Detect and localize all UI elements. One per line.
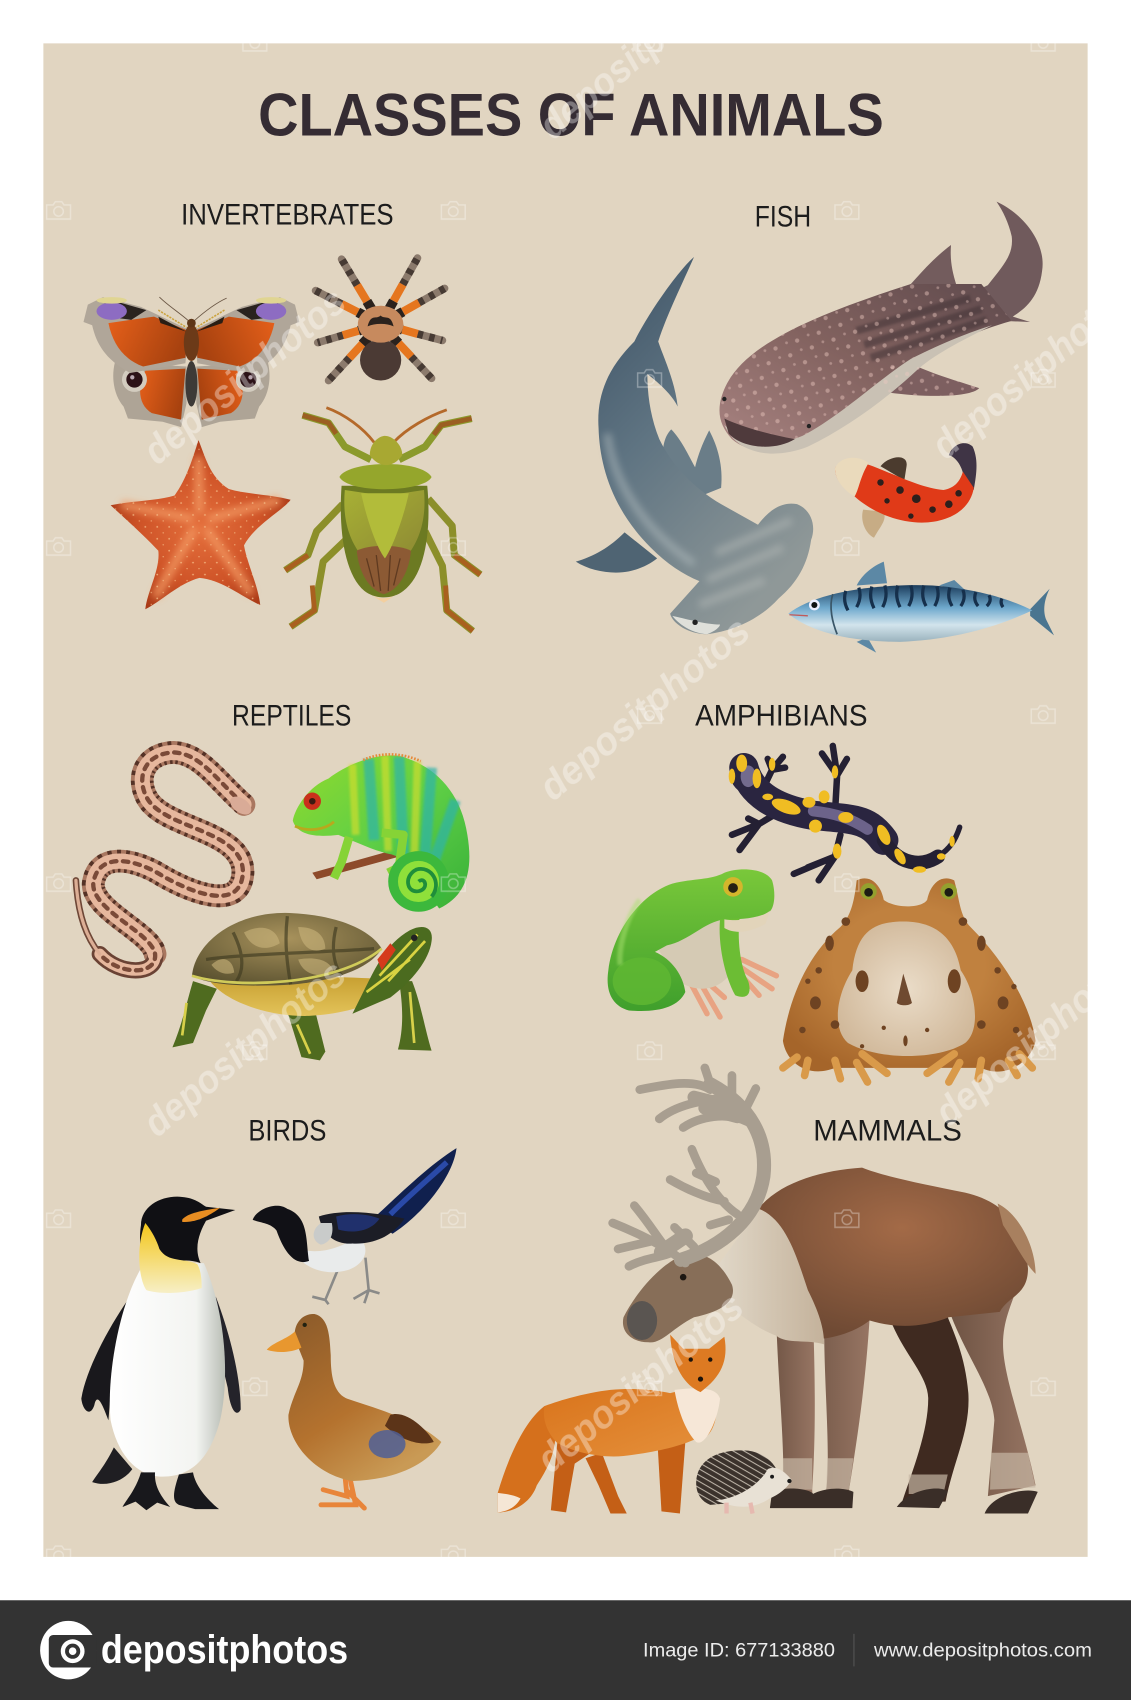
heading: fish: FISH — [755, 202, 811, 234]
footer bar — [0, 1600, 1131, 1700]
icon: tree frog — [608, 869, 776, 1017]
icon: tarantula — [316, 258, 445, 381]
icon: emperor penguin — [81, 1197, 241, 1510]
watermark: depositphotos diagonal text: depositphotos — [135, 280, 354, 473]
icon: fire salamander — [725, 746, 960, 880]
heading: invertebrates: INVERTEBRATES — [181, 199, 394, 231]
icon: hedgehog — [696, 1450, 792, 1514]
footer: image id: Image ID: 677133880 — [643, 1640, 835, 1662]
icon: koi carp — [835, 443, 977, 538]
icon: toad — [783, 878, 1036, 1082]
heading: birds: BIRDS — [248, 1116, 326, 1148]
icon: reindeer — [613, 1068, 1038, 1514]
icon: whale shark — [719, 202, 1043, 454]
icon: starfish — [111, 440, 291, 609]
icon: hammerhead shark — [576, 257, 813, 634]
watermark: depositphotos diagonal text — [135, 0, 1131, 1481]
watermark: depositphotos diagonal text: depositphotos — [531, 609, 758, 809]
icon: chameleon — [293, 754, 469, 912]
icon: mackerel — [788, 562, 1054, 653]
heading: mammals: MAMMALS — [813, 1116, 962, 1148]
watermark: depositphotos diagonal text: depositphotos — [529, 1285, 752, 1481]
heading: amphibians: AMPHIBIANS — [695, 700, 867, 732]
icon: red-eared turtle — [172, 913, 432, 1060]
icon: green shield bug — [285, 408, 480, 631]
icon: snake — [76, 752, 255, 970]
icon: depositphotos logo — [40, 1621, 97, 1679]
footer: logo wordmark: depositphotos — [101, 1628, 348, 1672]
footer: website url: www.depositphotos.com — [873, 1640, 1092, 1662]
icon: peacock butterfly — [83, 297, 299, 427]
icon: red fox — [498, 1335, 726, 1514]
title: CLASSES OF ANIMALS — [258, 81, 884, 149]
watermark: depositphotos diagonal text: depositphotos — [135, 952, 354, 1145]
icon: duck — [267, 1314, 441, 1508]
heading: reptiles: REPTILES — [232, 700, 351, 732]
icon: magpie — [253, 1148, 457, 1304]
